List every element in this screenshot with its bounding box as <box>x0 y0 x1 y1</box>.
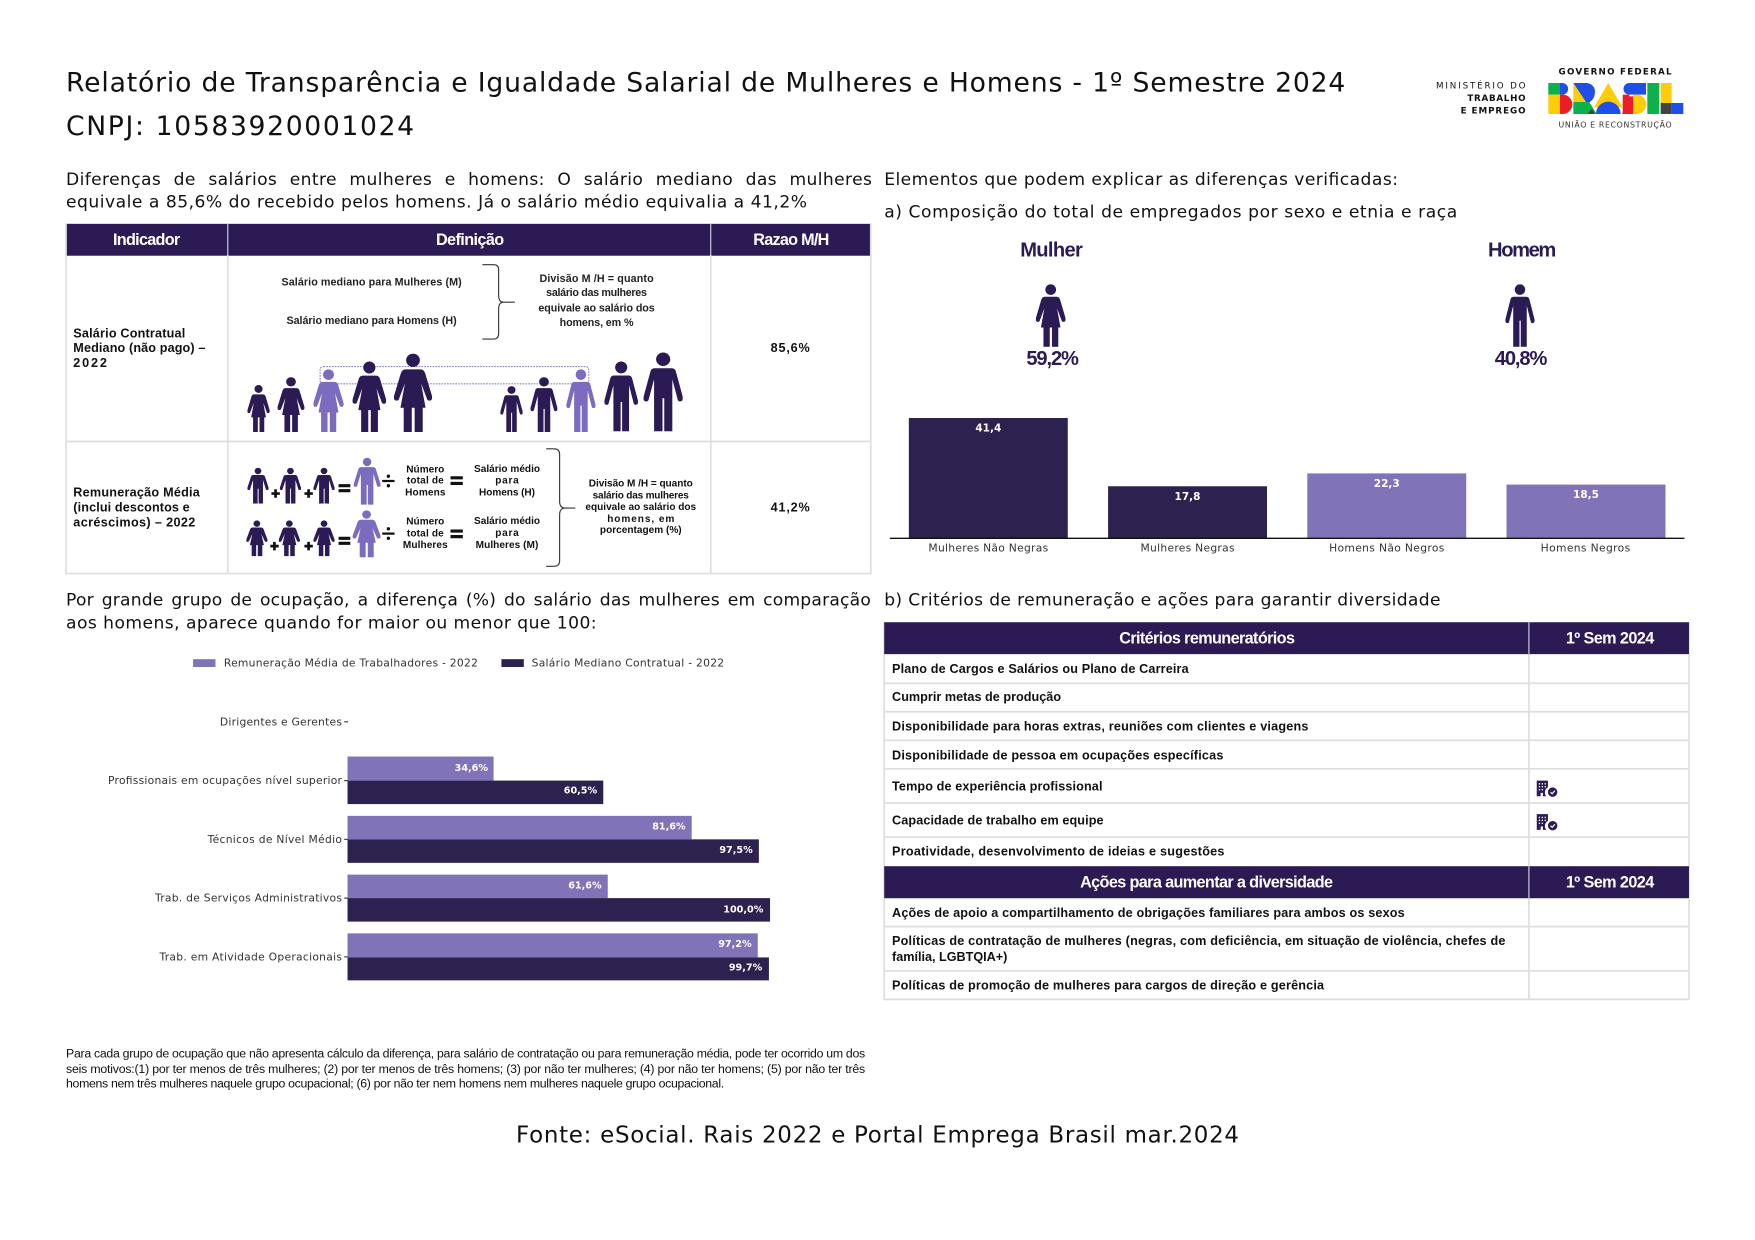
critérios: Disponibilidade para horas extras, reuniões com clientes e viagens <box>892 719 1308 733</box>
ações: Políticas de contratação de mulheres (negras, com deficiência, em situação de violência, chefes de <box>892 934 1505 948</box>
categoria: atividade operacional: Trab. em Atividade Operacionais <box>158 950 342 963</box>
text block: diferenças de salários: equivale a 85,6% do recebido pelos homens. Já o salário médio equivalia a 41,2% <box>66 193 807 213</box>
resumo: mulher: Mulher <box>1020 240 1083 262</box>
definição: remuneração média homens: para <box>495 476 519 487</box>
resumo: homem: Homem <box>1488 240 1556 262</box>
categoria: dirigentes e gerentes: Dirigentes e Gerentes <box>220 715 342 728</box>
bar chart: composição por sexo e raça: Homens Não Negros <box>1329 541 1445 554</box>
definição: remuneração média homens: Salário médio <box>474 464 540 475</box>
chave e divisão M/H: homens, em <box>607 514 674 525</box>
indicador: remuneração média: Remuneração Média <box>73 485 201 499</box>
categoria: atividade operacional: 97,2% <box>718 939 752 950</box>
logo: ministério e governo federal: MINISTÉRIO DO <box>1436 80 1526 92</box>
title: CNPJ: 10583920001024 <box>66 111 414 142</box>
logo: ministério e governo federal: GOVERNO FEDERAL <box>1559 68 1672 78</box>
definição: remuneração média homens: total de <box>407 476 444 487</box>
bar chart: composição por sexo e raça: 22,3 <box>1374 478 1400 490</box>
definição: salário mediano: Salário mediano para Mulheres (M) <box>281 277 462 289</box>
bar chart: composição por sexo e raça: Mulheres Não Negras <box>928 541 1049 554</box>
icon: empresa com verificação <box>1537 781 1557 797</box>
text block: elementos que podem explicar: Elementos que podem explicar as diferenças verificadas: <box>884 170 1398 190</box>
legend: Salário Mediano Contratual - 2022 <box>532 657 724 670</box>
header: ações para aumentar a diversidade <box>884 866 1689 898</box>
razão 41,2%: 41,2% <box>771 501 810 515</box>
text block: por grande grupo de ocupação <box>66 590 871 633</box>
bar chart: composição por sexo e raça: Homens Negros <box>1541 541 1631 554</box>
definição: remuneração média homens: Número <box>406 465 444 476</box>
definição: remuneração média mulheres: Salário médio <box>474 516 540 527</box>
categoria: atividade operacional: 99,7% <box>729 963 763 974</box>
ações: família, LGBTQIA+) <box>892 950 1007 964</box>
bar chart: composição por sexo e raça <box>890 418 1684 554</box>
logo: ministério e governo federal: TRABALHO <box>1467 94 1526 104</box>
table header: Razao M/H <box>753 231 829 249</box>
categoria: técnicos de nível médio: Técnicos de Nível Médio <box>207 833 342 846</box>
definição: remuneração média mulheres <box>246 510 540 557</box>
categoria: técnicos de nível médio <box>207 816 759 863</box>
indicador: remuneração média <box>73 485 201 530</box>
ações: Políticas de promoção de mulheres para cargos de direção e gerência <box>892 978 1325 992</box>
definição: salário mediano: equivale ao salário dos <box>538 302 655 314</box>
bar chart: composição por sexo e raça: 18,5 <box>1573 489 1599 501</box>
critérios: Tempo de experiência profissional <box>892 780 1102 794</box>
header: critérios remuneratórios: 1º Sem 2024 <box>1566 629 1654 647</box>
definição: remuneração média mulheres: para <box>495 528 519 539</box>
title: Relatório de Transparência e Igualdade Salarial de Mulheres e Homens - 1º Semestre 2024 <box>66 67 1345 98</box>
indicador: remuneração média: acréscimos) – 2022 <box>73 516 195 530</box>
razão 85,6%: 85,6% <box>771 341 810 355</box>
footnote: Para cada grupo de ocupação que não apresenta cálculo da diferença, para salário de contratação ou para remuneração média, pode ter ocorrido um dos <box>66 1047 865 1061</box>
categoria: profissionais nível superior <box>108 757 603 804</box>
header: ações para aumentar a diversidade: Ações para aumentar a diversidade <box>1080 873 1333 891</box>
chave e divisão M/H <box>546 449 697 566</box>
bar chart: composição por sexo e raça: 41,4 <box>975 423 1001 435</box>
indicador: salário contratual <box>73 327 205 370</box>
definição: remuneração média mulheres: total de <box>407 528 444 539</box>
critérios: Plano de Cargos e Salários ou Plano de Carreira <box>892 662 1190 676</box>
footnote: seis motivos:(1) por ter menos de três mulheres; (2) por ter menos de três homens; (3) por não ter mulheres; (4) por não ter homens; (5) por não ter três <box>66 1062 865 1076</box>
footnote <box>66 1047 865 1090</box>
heading: critérios de remuneração: b) Critérios de remuneração e ações para garantir diversidade <box>884 590 1440 610</box>
table header: Definição <box>436 231 504 249</box>
resumo: mulher <box>1020 240 1083 370</box>
critérios: Cumprir metas de produção <box>892 690 1061 704</box>
categoria: profissionais nível superior: 60,5% <box>564 786 597 797</box>
legend: Remuneração Média de Trabalhadores - 2022 <box>224 657 478 670</box>
definição: salário mediano: Salário mediano para Homens (H) <box>287 315 457 327</box>
categoria: serviços administrativos: Trab. de Serviços Administrativos <box>154 892 342 905</box>
pictograma: mulheres e homens em ordem de salário <box>247 353 683 432</box>
header: ações para aumentar a diversidade: 1º Sem 2024 <box>1566 873 1654 891</box>
table grid <box>884 622 1689 999</box>
categoria: técnicos de nível médio: 81,6% <box>652 822 686 833</box>
text block: diferenças de salários <box>66 170 872 213</box>
definição: remuneração média homens: Homens (H) <box>479 487 535 498</box>
indicador: salário contratual: Salário Contratual <box>73 327 185 341</box>
header: critérios remuneratórios <box>884 622 1689 654</box>
definição: salário mediano <box>281 265 655 339</box>
indicador: remuneração média: (inclui descontos e <box>73 501 190 515</box>
ações: Ações de apoio a compartilhamento de obrigações familiares para ambos os sexos <box>892 906 1405 920</box>
chave e divisão M/H: equivale ao salário dos <box>585 502 697 513</box>
resumo: homem: 40,8% <box>1495 348 1547 370</box>
definição: remuneração média homens: Homens <box>405 487 446 498</box>
title <box>66 67 1345 142</box>
table header <box>66 224 871 256</box>
icon: empresa com verificação <box>1537 814 1557 830</box>
indicador: salário contratual: 2022 <box>73 356 107 370</box>
table grid <box>66 224 871 574</box>
bar chart: grupos de ocupação <box>108 715 770 980</box>
resumo: mulher: 59,2% <box>1026 348 1079 370</box>
categoria: profissionais nível superior: Profissionais em ocupações nível superior <box>108 774 343 787</box>
heading: composição do total de empregados: a) Composição do total de empregados por sexo e etnia e raça <box>884 203 1457 223</box>
indicador: salário contratual: Mediano (não pago) – <box>73 341 205 355</box>
header: critérios remuneratórios: Critérios remuneratórios <box>1119 629 1295 647</box>
definição: remuneração média mulheres: Mulheres <box>403 540 448 551</box>
text block: por grande grupo de ocupação: aos homens, aparece quando for maior ou menor que 100: <box>66 613 597 633</box>
definição: remuneração média mulheres: Mulheres (M) <box>476 540 538 551</box>
logo: ministério e governo federal: E EMPREGO <box>1461 106 1526 116</box>
definição: remuneração média homens <box>247 458 540 505</box>
definição: salário mediano: salário das mulheres <box>546 287 647 299</box>
resumo: homem <box>1488 240 1556 370</box>
categoria: serviços administrativos: 61,6% <box>568 880 602 891</box>
fonte: Fonte: eSocial. Rais 2022 e Portal Emprega Brasil mar.2024 <box>516 1122 1239 1148</box>
chave e divisão M/H: salário das mulheres <box>593 490 689 501</box>
panel: tabela indicador definição razão <box>66 224 871 574</box>
chave e divisão M/H: porcentagem (%) <box>600 525 682 536</box>
critérios <box>892 662 1308 859</box>
panel: tabela critérios e ações <box>884 622 1689 999</box>
definição: salário mediano: Divisão M /H = quanto <box>539 273 654 285</box>
categoria: atividade operacional <box>158 933 769 980</box>
categoria: serviços administrativos: 100,0% <box>723 904 764 915</box>
critérios: Capacidade de trabalho em equipe <box>892 813 1104 827</box>
text block: diferenças de salários: Diferenças de salários entre mulheres e homens: O salário mediano das mulheres <box>66 170 872 190</box>
categoria: serviços administrativos <box>154 875 770 922</box>
logo: ministério e governo federal <box>1436 68 1683 129</box>
logo: ministério e governo federal: UNIÃO E RECONSTRUÇÃO <box>1559 119 1672 129</box>
legend <box>193 657 724 670</box>
bar chart: composição por sexo e raça: 17,8 <box>1175 491 1201 503</box>
categoria: técnicos de nível médio: 97,5% <box>719 845 753 856</box>
text block: por grande grupo de ocupação: Por grande grupo de ocupação, a diferença (%) do salário das mulheres em comparação <box>66 590 871 610</box>
bar chart: composição por sexo e raça: Mulheres Negras <box>1141 541 1235 554</box>
table header: Indicador <box>113 231 181 249</box>
critérios: Proatividade, desenvolvimento de ideias e sugestões <box>892 845 1224 859</box>
ações <box>892 906 1505 992</box>
critérios: Disponibilidade de pessoa em ocupações específicas <box>892 748 1223 762</box>
categoria: profissionais nível superior: 34,6% <box>455 763 488 774</box>
definição: remuneração média mulheres: Número <box>406 517 444 528</box>
definição: salário mediano: homens, em % <box>560 317 634 329</box>
chave e divisão M/H: Divisão M /H = quanto <box>589 479 693 490</box>
footnote: homens nem três mulheres naquele grupo ocupacional; (6) por não ter nem homens nem mulheres naquele grupo ocupacional. <box>66 1076 724 1090</box>
